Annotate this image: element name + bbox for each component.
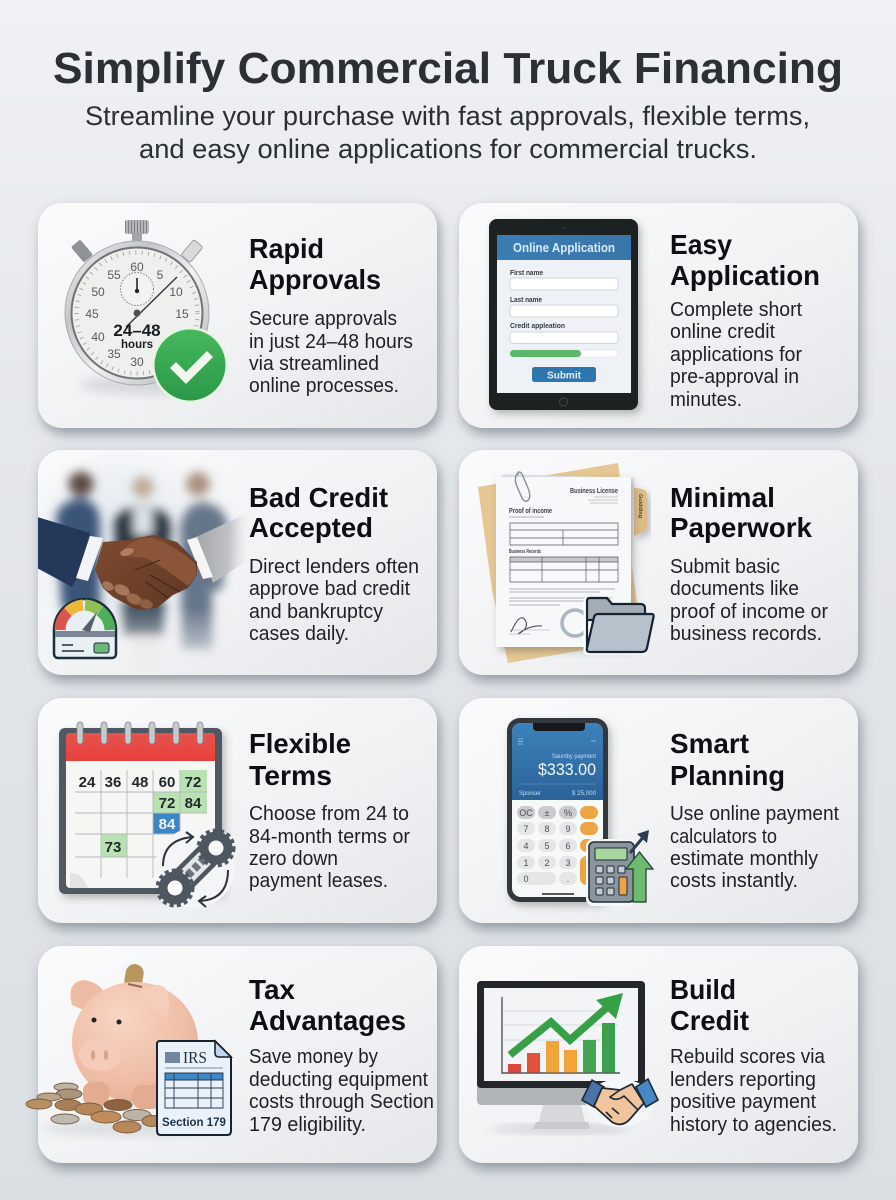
heading: [249, 482, 388, 543]
icon: tablet with online form: Submit: [547, 370, 582, 382]
icon: credit score gauge: [54, 599, 116, 658]
icon: phone calculator: [507, 718, 608, 902]
text block: [249, 556, 419, 645]
text block: proof of income or: [670, 601, 828, 623]
icon: stopwatch: [65, 220, 220, 395]
text block: 179 eligibility.: [249, 1114, 366, 1136]
text block: positive payment: [670, 1091, 816, 1113]
title: Simplify Commercial Truck Financing: [53, 44, 843, 93]
icon: calendar: 84: [159, 816, 176, 833]
icon: stopwatch: 60: [130, 260, 144, 274]
text block: and bankruptcy: [249, 601, 383, 623]
icon: stopwatch: hours: [121, 339, 153, 351]
icon: stack of documents in folder: [478, 463, 647, 663]
icon: phone calculator: 4: [523, 841, 529, 851]
text block: Complete short: [670, 299, 802, 321]
text block: in just 24–48 hours: [249, 331, 413, 353]
heading: Smart: [670, 728, 749, 759]
text block: lenders reporting: [670, 1069, 816, 1091]
icon: calendar: [59, 722, 222, 894]
panel: easy application: [459, 203, 858, 428]
panel: smart planning: [459, 698, 858, 923]
text block: applications for: [670, 344, 802, 366]
text block: costs instantly.: [670, 870, 798, 892]
text block: history to agencies.: [670, 1114, 837, 1136]
icon: tablet with online form: Online Application: [513, 240, 615, 255]
text block: pre-approval in: [670, 366, 799, 388]
text block: calculators to: [670, 826, 777, 848]
heading: Paperwork: [670, 512, 812, 543]
icon: stack of documents in folder: Business Records: [509, 549, 541, 555]
text block: Choose from 24 to: [249, 803, 409, 825]
subtitle: and easy online applications for commercial trucks.: [139, 134, 757, 164]
right sleeve and cuff: [187, 516, 243, 583]
heading: [249, 728, 351, 791]
text block: documents like: [670, 578, 799, 600]
icon: phone calculator: Sauntby payment: [552, 754, 596, 760]
icon: tablet with online form: Credit appleation: [510, 321, 565, 330]
text block: Direct lenders often: [249, 556, 419, 578]
icon: phone calculator: 3: [565, 858, 571, 868]
icon: phone calculator: .: [567, 874, 569, 884]
icon: calendar: 73: [105, 839, 121, 856]
text block: cases daily.: [249, 623, 349, 645]
icon: stopwatch: 5: [157, 268, 164, 282]
icon: calendar: 24: [79, 774, 96, 791]
text block: [670, 556, 828, 645]
text block: costs through Section: [249, 1091, 434, 1113]
icon: phone calculator: 8: [544, 824, 550, 834]
icon: calendar: 60: [159, 774, 175, 791]
icon: stopwatch: 15: [175, 307, 189, 321]
icon: green check badge: [152, 327, 228, 403]
icon: calendar: 48: [132, 774, 148, 791]
heading: Rapid: [249, 233, 324, 264]
text block: [670, 299, 802, 411]
text block: online processes.: [249, 375, 399, 397]
icon: stopwatch: 50: [91, 285, 105, 299]
heading: Application: [670, 260, 820, 291]
icon: IRS Section 179 form: IRS: [183, 1048, 207, 1067]
icon: piggy bank: [40, 963, 220, 1136]
heading: [670, 974, 749, 1036]
icon: stopwatch: 45: [85, 307, 99, 321]
left sleeve and cuff: [37, 517, 103, 587]
heading: Terms: [249, 760, 332, 791]
icon: calendar: 36: [105, 774, 121, 791]
panel: minimal paperwork: [459, 450, 858, 675]
text block: deducting equipment: [249, 1069, 428, 1091]
text block: estimate monthly: [670, 848, 818, 870]
heading: [249, 974, 406, 1036]
icon: stack of documents in folder: Proof of income: [509, 506, 552, 515]
text block: business records.: [670, 623, 822, 645]
text block: Use online payment: [670, 803, 839, 825]
photo: blurred business people and handshake: [38, 462, 243, 654]
icon: phone calculator: 5: [544, 841, 550, 851]
heading: [670, 728, 785, 791]
icon: phone calculator: $ 25,000: [572, 791, 597, 797]
icon: stopwatch: 35: [107, 347, 121, 361]
text block: payment leases.: [249, 870, 388, 892]
icon: phone calculator: 7: [523, 824, 529, 834]
icon: tablet with online form: [489, 219, 638, 410]
icon: tablet with online form: First name: [510, 268, 543, 277]
subtitle: [85, 101, 810, 164]
icon: phone calculator: 1: [523, 858, 529, 868]
icon: phone calculator: Sponser: [519, 791, 541, 797]
icon: stopwatch: 24–48: [113, 321, 161, 340]
panel: rapid approvals: [38, 203, 437, 428]
icon: tablet with online form: Last name: [510, 295, 542, 304]
panel: bad credit accepted: [37, 450, 437, 676]
heading: Advantages: [249, 1005, 406, 1036]
icon: stopwatch: 40: [91, 330, 105, 344]
icon: phone calculator: ±: [545, 808, 550, 818]
heading: Build: [670, 974, 736, 1005]
text block: [670, 1046, 837, 1136]
heading: Credit: [670, 1005, 749, 1036]
icon: IRS Section 179 form: Section 179: [162, 1117, 226, 1129]
heading: Tax: [249, 974, 295, 1005]
text block: [670, 803, 839, 892]
text block: zero down: [249, 848, 338, 870]
icon: stopwatch: 55: [107, 268, 121, 282]
icon: calendar: 84: [185, 795, 202, 812]
text block: [249, 803, 410, 892]
heading: Planning: [670, 760, 785, 791]
icon: coins: [26, 1083, 162, 1133]
icon: monitor with rising chart: [477, 981, 645, 1133]
icon: stopwatch: 30: [130, 355, 144, 369]
icon: phone calculator: 6: [565, 841, 571, 851]
clasped hands: [95, 535, 197, 610]
icon: phone calculator: %: [564, 808, 572, 818]
icon: stopwatch: 10: [169, 285, 183, 299]
icon: stack of documents in folder: Business License: [570, 488, 618, 495]
icon: calculator with growth arrows: [586, 830, 653, 906]
panel: flexible terms: [38, 698, 437, 923]
icon: phone calculator: $333.00: [538, 761, 596, 779]
icon: calendar: 72: [159, 795, 175, 812]
heading: Minimal: [670, 482, 775, 513]
text block: [249, 308, 413, 397]
heading: [670, 482, 812, 543]
heading: [249, 233, 381, 295]
text block: Rebuild scores via: [670, 1046, 826, 1068]
heading: Approvals: [249, 264, 381, 295]
icon: calendar: 72: [185, 774, 201, 791]
icon: handshake badge: [582, 1079, 658, 1127]
icon: stack of documents in folder: Guidding: [637, 494, 643, 518]
icon: open folder: [586, 598, 654, 652]
heading: Flexible: [249, 728, 351, 759]
icon: chain with gears and arrows: [155, 828, 235, 908]
text block: 84-month terms or: [249, 826, 410, 848]
text block: via streamlined: [249, 353, 379, 375]
panel: tax advantages: [26, 946, 437, 1163]
text block: Save money by: [249, 1046, 378, 1068]
text block: online credit: [670, 321, 775, 343]
icon: phone calculator: 2: [544, 858, 550, 868]
icon: phone calculator: 0: [523, 874, 529, 884]
heading: Easy: [670, 229, 732, 260]
heading: [670, 229, 820, 291]
icon: phone calculator: OC: [519, 808, 533, 818]
panel: build credit: [459, 946, 858, 1163]
text block: minutes.: [670, 389, 742, 411]
text block: Submit basic: [670, 556, 780, 578]
icon: IRS Section 179 form: [157, 1041, 231, 1135]
icon: phone calculator: 9: [565, 824, 571, 834]
text block: approve bad credit: [249, 578, 410, 600]
heading: Bad Credit: [249, 482, 388, 513]
text block: [249, 1046, 434, 1136]
text block: Secure approvals: [249, 308, 397, 330]
subtitle: Streamline your purchase with fast approvals, flexible terms,: [85, 101, 810, 131]
heading: Accepted: [249, 512, 373, 543]
